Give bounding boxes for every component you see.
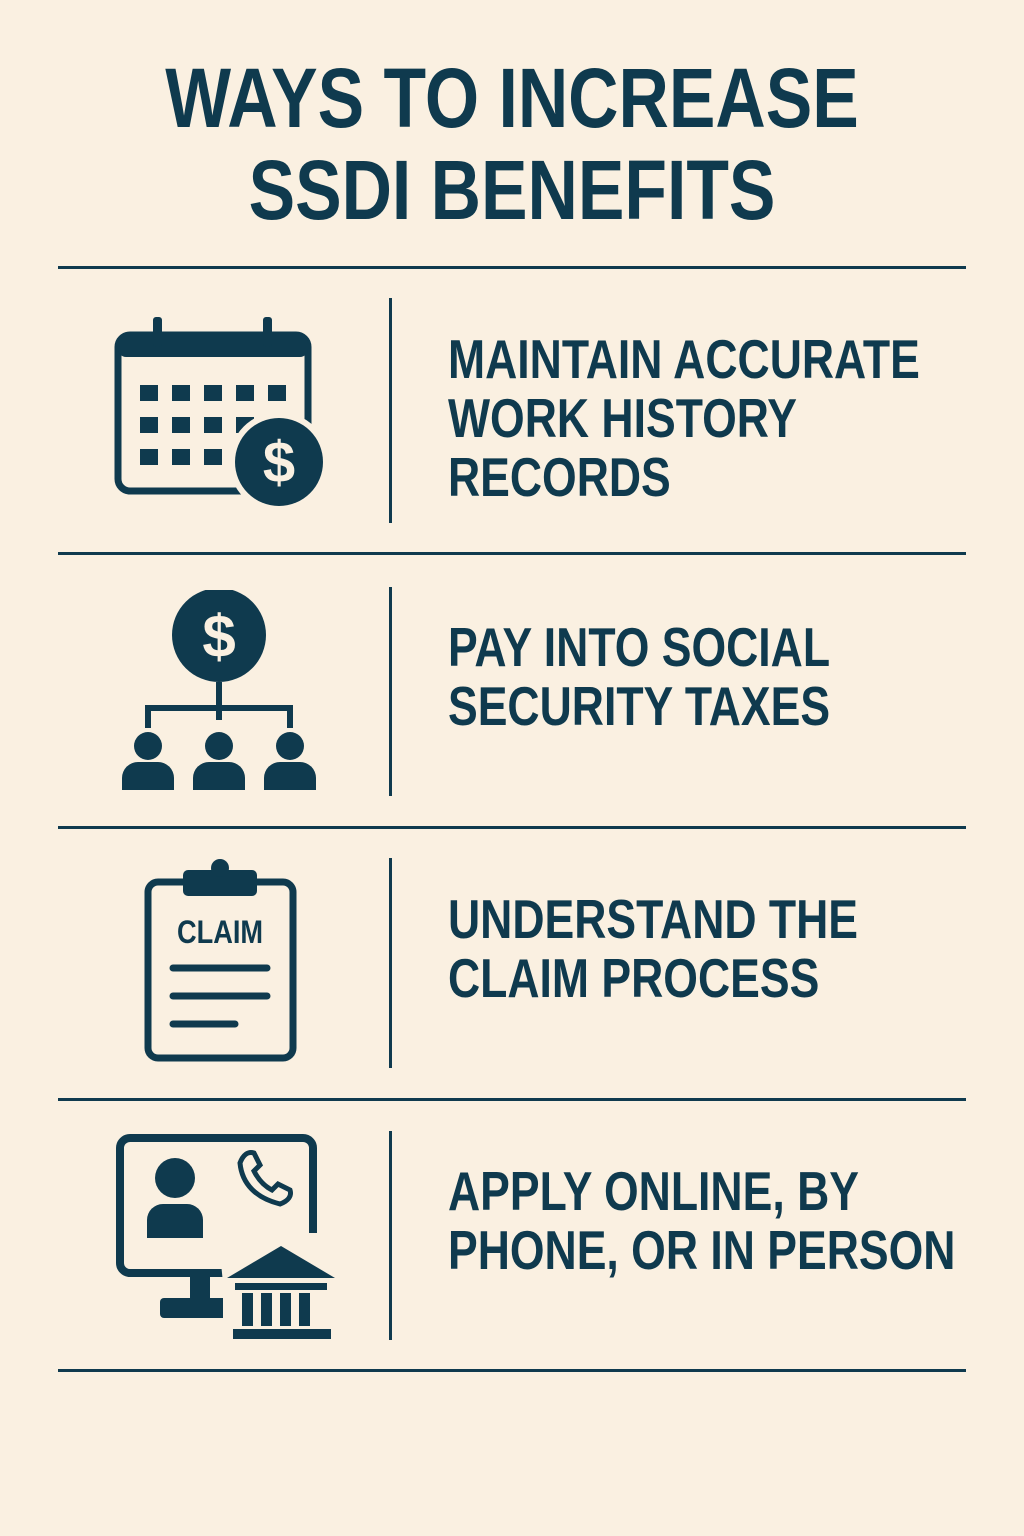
- icon: dollar network: $: [202, 603, 236, 670]
- icon: dollar network: [122, 590, 316, 790]
- icon: claim clipboard: CLAIM: [177, 915, 263, 951]
- text: understand: UNDERSTAND THE: [448, 888, 858, 950]
- icon: calendar with dollar: $: [263, 430, 295, 495]
- text: pay: PAY INTO SOCIAL: [448, 616, 830, 678]
- icon: calendar with dollar: [114, 317, 323, 506]
- text: maintain: MAINTAIN ACCURATE: [448, 328, 920, 390]
- icon: computer phone bank: [116, 1134, 335, 1339]
- text: maintain: RECORDS: [448, 446, 671, 508]
- title: WAYS TO INCREASE: [165, 51, 859, 145]
- text: apply: PHONE, OR IN PERSON: [448, 1219, 955, 1281]
- text: pay: SECURITY TAXES: [448, 675, 830, 737]
- title: SSDI BENEFITS: [249, 143, 775, 237]
- text: understand: CLAIM PROCESS: [448, 947, 819, 1009]
- text: maintain: [448, 328, 920, 508]
- text: apply: APPLY ONLINE, BY: [448, 1160, 859, 1222]
- icon: claim clipboard: [144, 859, 296, 1062]
- text: apply: [448, 1160, 955, 1281]
- text: maintain: WORK HISTORY: [448, 387, 797, 449]
- text: understand: [448, 888, 858, 1009]
- title: [165, 51, 859, 237]
- text: pay: [448, 616, 830, 737]
